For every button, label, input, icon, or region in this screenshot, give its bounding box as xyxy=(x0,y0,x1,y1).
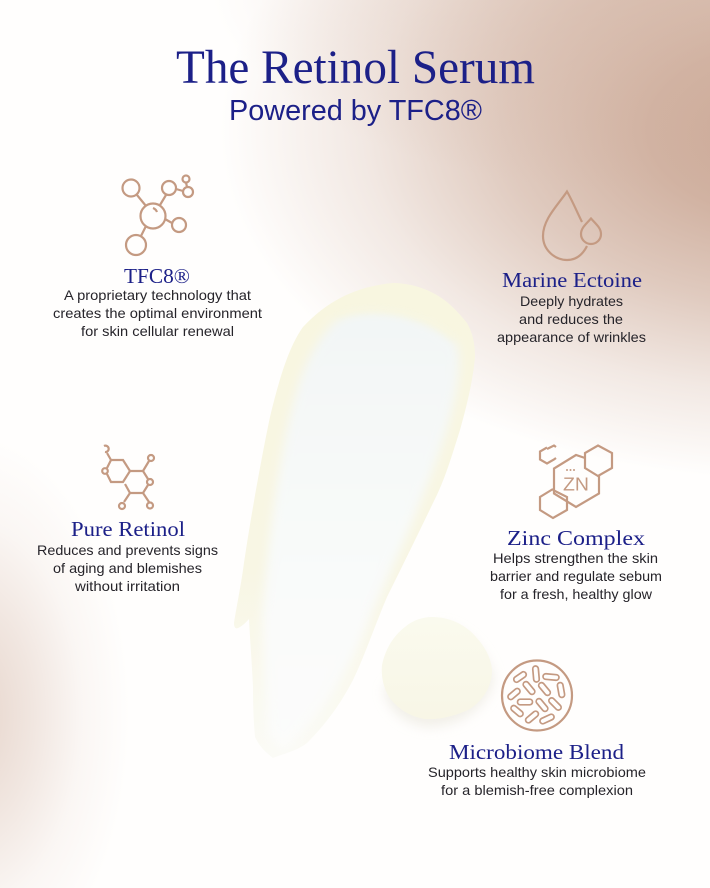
description xyxy=(428,764,646,798)
description xyxy=(37,542,218,594)
block: Pure Retinol xyxy=(37,446,218,594)
block: Microbiome Blend xyxy=(428,660,646,798)
icon: microbiome xyxy=(502,660,572,730)
heading: Marine Ectoine xyxy=(502,268,642,292)
block: Zinc Complex xyxy=(490,446,662,602)
title: The Retinol Serum xyxy=(176,41,535,94)
icon: retinol structure xyxy=(102,446,154,509)
description: Supports healthy skin microbiome xyxy=(428,764,646,780)
block: TFC8 xyxy=(53,176,262,339)
description: barrier and regulate sebum xyxy=(490,568,662,584)
description: for a blemish-free complexion xyxy=(441,782,633,798)
description: Reduces and prevents signs xyxy=(37,542,218,558)
description: Deeply hydrates xyxy=(520,293,623,309)
description: for skin cellular renewal xyxy=(81,323,234,339)
icon: zinc hexagons xyxy=(540,446,612,518)
description xyxy=(53,287,262,339)
heading: Microbiome Blend xyxy=(449,740,624,764)
description: A proprietary technology that xyxy=(64,287,251,303)
serum smear xyxy=(234,283,475,758)
description: Helps strengthen the skin xyxy=(493,550,658,566)
block: Marine Ectoine xyxy=(497,192,646,345)
heading: Zinc Complex xyxy=(507,526,645,550)
description: creates the optimal environment xyxy=(53,305,262,321)
subtitle: Powered by TFC8® xyxy=(229,95,482,127)
description: for a fresh, healthy glow xyxy=(500,586,653,602)
description: of aging and blemishes xyxy=(53,560,202,576)
description: without irritation xyxy=(74,578,180,594)
description: appearance of wrinkles xyxy=(497,329,646,345)
icon: water drops xyxy=(543,192,601,260)
serum blob xyxy=(382,617,494,727)
description xyxy=(497,293,646,345)
heading: Pure Retinol xyxy=(71,517,185,541)
description xyxy=(490,550,662,602)
icon: zinc hexagons: ZN xyxy=(563,474,589,494)
icon: molecule network xyxy=(122,176,193,255)
description: and reduces the xyxy=(519,311,623,327)
heading: TFC8® xyxy=(124,264,190,288)
